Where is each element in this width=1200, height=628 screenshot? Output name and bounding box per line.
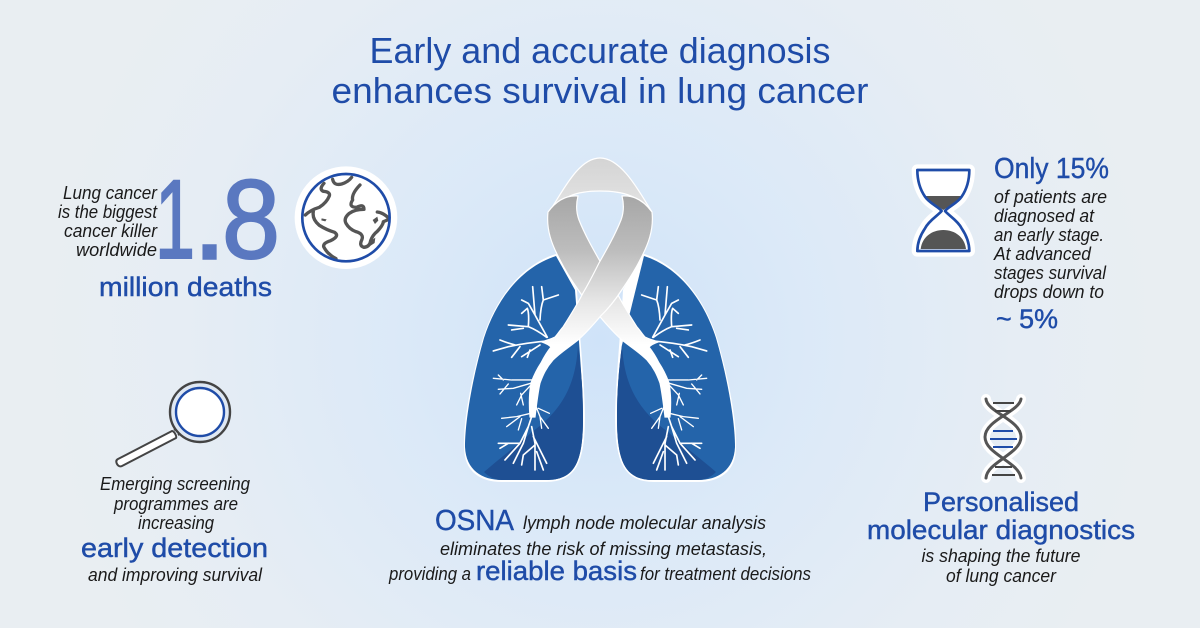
- ribbon back band: [548, 196, 671, 417]
- text: emerging screening: programmes are: [113, 494, 238, 514]
- text: OSNA description: eliminates the risk of missing metastasis,: [440, 539, 767, 559]
- panel: personalised diagnostics: [867, 399, 1135, 586]
- left lung: [465, 255, 584, 481]
- ribbon front band: [529, 196, 652, 417]
- heading: personalised molecular diagnostics: Personalised: [923, 487, 1079, 517]
- text: shaping the future: of lung cancer: [946, 566, 1057, 586]
- text: emerging screening: increasing: [138, 513, 214, 533]
- heading: early detection: early detection: [81, 533, 268, 563]
- text: ~5%: ~ 5%: [996, 304, 1058, 334]
- big number 1.8: .: [194, 157, 225, 282]
- text: patients diagnosed: drops down to: [994, 282, 1104, 302]
- text: patients diagnosed: an early stage.: [994, 225, 1104, 245]
- text: only 15%: Only 15%: [994, 153, 1109, 185]
- title: [332, 30, 868, 111]
- text: OSNA description: providing a: [388, 564, 471, 584]
- text: OSNA description: lymph node molecular analysis: [523, 513, 766, 533]
- awareness ribbon: [529, 158, 671, 417]
- big number 1.8: 8: [222, 157, 280, 282]
- heading: personalised molecular diagnostics: molecular diagnostics: [867, 515, 1135, 545]
- icon: globe: [295, 166, 397, 269]
- title: Early and accurate diagnosis: [370, 30, 830, 71]
- text: lung cancer is the biggest killer: cancer killer: [64, 221, 158, 241]
- text: lung cancer is the biggest killer: is the biggest: [58, 202, 158, 222]
- text: lung cancer is the biggest killer: [58, 183, 158, 260]
- text: improving survival: and improving survival: [88, 565, 263, 585]
- text: patients diagnosed: stages survival: [994, 263, 1107, 283]
- heading: OSNA: OSNA: [435, 505, 515, 537]
- big number 1.8: 1: [155, 157, 195, 282]
- right lung: [616, 255, 735, 481]
- text: patients diagnosed: At advanced: [993, 244, 1092, 264]
- panel: early detection: [81, 382, 268, 585]
- text: shaping the future: is shaping the future: [922, 546, 1080, 566]
- text: emerging screening: Emerging screening: [100, 474, 250, 494]
- heading: personalised molecular diagnostics: [867, 487, 1135, 545]
- text: lung cancer is the biggest killer: worldwide: [76, 240, 157, 260]
- text: lung cancer is the biggest killer: Lung cancer: [63, 183, 158, 203]
- text: shaping the future: [922, 546, 1080, 586]
- ribbon top loop: [549, 158, 652, 212]
- text: OSNA description: for treatment decisions: [640, 564, 811, 584]
- panel: OSNA: [388, 505, 811, 586]
- big number 1.8: [155, 157, 280, 282]
- text: OSNA description: [388, 513, 811, 584]
- left bronchial tree: [493, 287, 558, 470]
- text: emerging screening: [100, 474, 250, 533]
- icon: DNA helix: [985, 399, 1021, 478]
- text: patients diagnosed: diagnosed at: [994, 206, 1095, 226]
- text: patients diagnosed: [993, 187, 1107, 302]
- million deaths: million deaths: [99, 272, 272, 302]
- panel: 1.8 million deaths: [58, 166, 398, 296]
- panel: lungs and ribbon: [465, 158, 735, 481]
- text: patients diagnosed: of patients are: [994, 187, 1107, 207]
- panel: only 15%: [917, 153, 1109, 334]
- right bronchial tree: [642, 287, 707, 470]
- icon: hourglass: [917, 170, 969, 251]
- heading: reliable basis: reliable basis: [476, 556, 637, 586]
- title: enhances survival in lung cancer: [332, 70, 868, 111]
- icon: magnifying glass: [116, 382, 230, 466]
